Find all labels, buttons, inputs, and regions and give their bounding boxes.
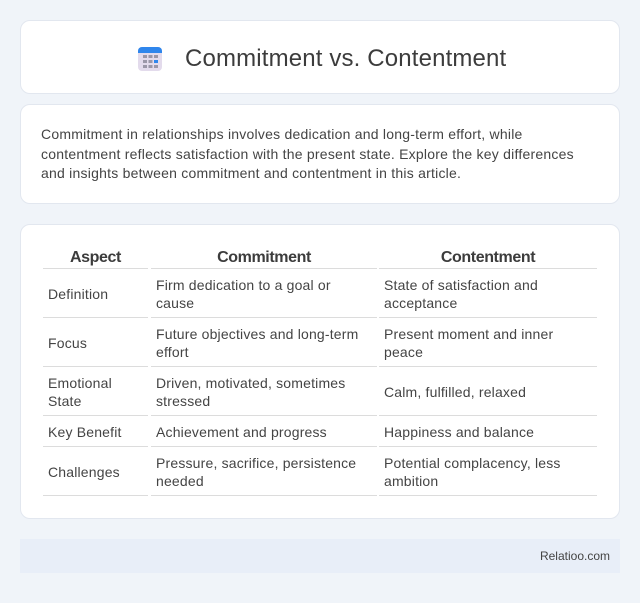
focus: contentment: Present moment and inner xyxy=(384,326,553,342)
focus: commitment: effort xyxy=(156,344,189,360)
definition: contentment xyxy=(384,277,538,311)
definition: commitment xyxy=(156,277,331,311)
focus: contentment xyxy=(384,326,553,360)
panel: title card xyxy=(20,20,620,94)
definition: commitment: cause xyxy=(156,295,194,311)
challenges: contentment xyxy=(384,455,561,489)
emotional state: commitment xyxy=(156,375,345,409)
challenges: commitment xyxy=(156,455,356,489)
intro text: Commitment in relationships involves dedication and long-term effort, while xyxy=(41,126,523,142)
intro text: and insights between commitment and contentment in this article. xyxy=(41,165,461,181)
emotional state: commitment: stressed xyxy=(156,393,210,409)
challenges: contentment: ambition xyxy=(384,473,438,489)
definition: contentment: acceptance xyxy=(384,295,457,311)
challenges: commitment: Pressure, sacrifice, persistence xyxy=(156,455,356,471)
row: emotional state: Emotional xyxy=(48,375,112,391)
key benefit: contentment: Happiness and balance xyxy=(384,424,534,440)
challenges: contentment: Potential complacency, less xyxy=(384,455,561,471)
panel: introduction xyxy=(20,104,620,204)
emotional state: commitment: Driven, motivated, sometimes xyxy=(156,375,345,391)
column heading: contentment: Contentment xyxy=(441,249,535,266)
icon: calendar xyxy=(138,47,162,71)
intro text: contentment reflects satisfaction with the present state. Explore the key differences xyxy=(41,146,574,162)
row: definition: Definition xyxy=(48,286,108,302)
row: challenges: Challenges xyxy=(48,464,120,480)
focus: commitment: Future objectives and long-term xyxy=(156,326,358,342)
title: Commitment vs. Contentment xyxy=(185,45,506,72)
definition: contentment: State of satisfaction and xyxy=(384,277,538,293)
row: emotional state: State xyxy=(48,393,82,409)
footer credit: Relatioo.com xyxy=(540,549,610,563)
key benefit: commitment: Achievement and progress xyxy=(156,424,327,440)
row: focus: Focus xyxy=(48,335,87,351)
focus: commitment xyxy=(156,326,358,360)
row: emotional state xyxy=(48,375,112,409)
emotional state: contentment: Calm, fulfilled, relaxed xyxy=(384,384,526,400)
panel: comparison table xyxy=(20,224,620,519)
definition: commitment: Firm dedication to a goal or xyxy=(156,277,331,293)
challenges: commitment: needed xyxy=(156,473,204,489)
column heading: commitment: Commitment xyxy=(217,249,311,266)
focus: contentment: peace xyxy=(384,344,423,360)
row: key benefit: Key Benefit xyxy=(48,424,122,440)
footer bar xyxy=(20,539,620,573)
column heading: aspect: Aspect xyxy=(70,249,121,266)
intro text xyxy=(41,126,574,181)
